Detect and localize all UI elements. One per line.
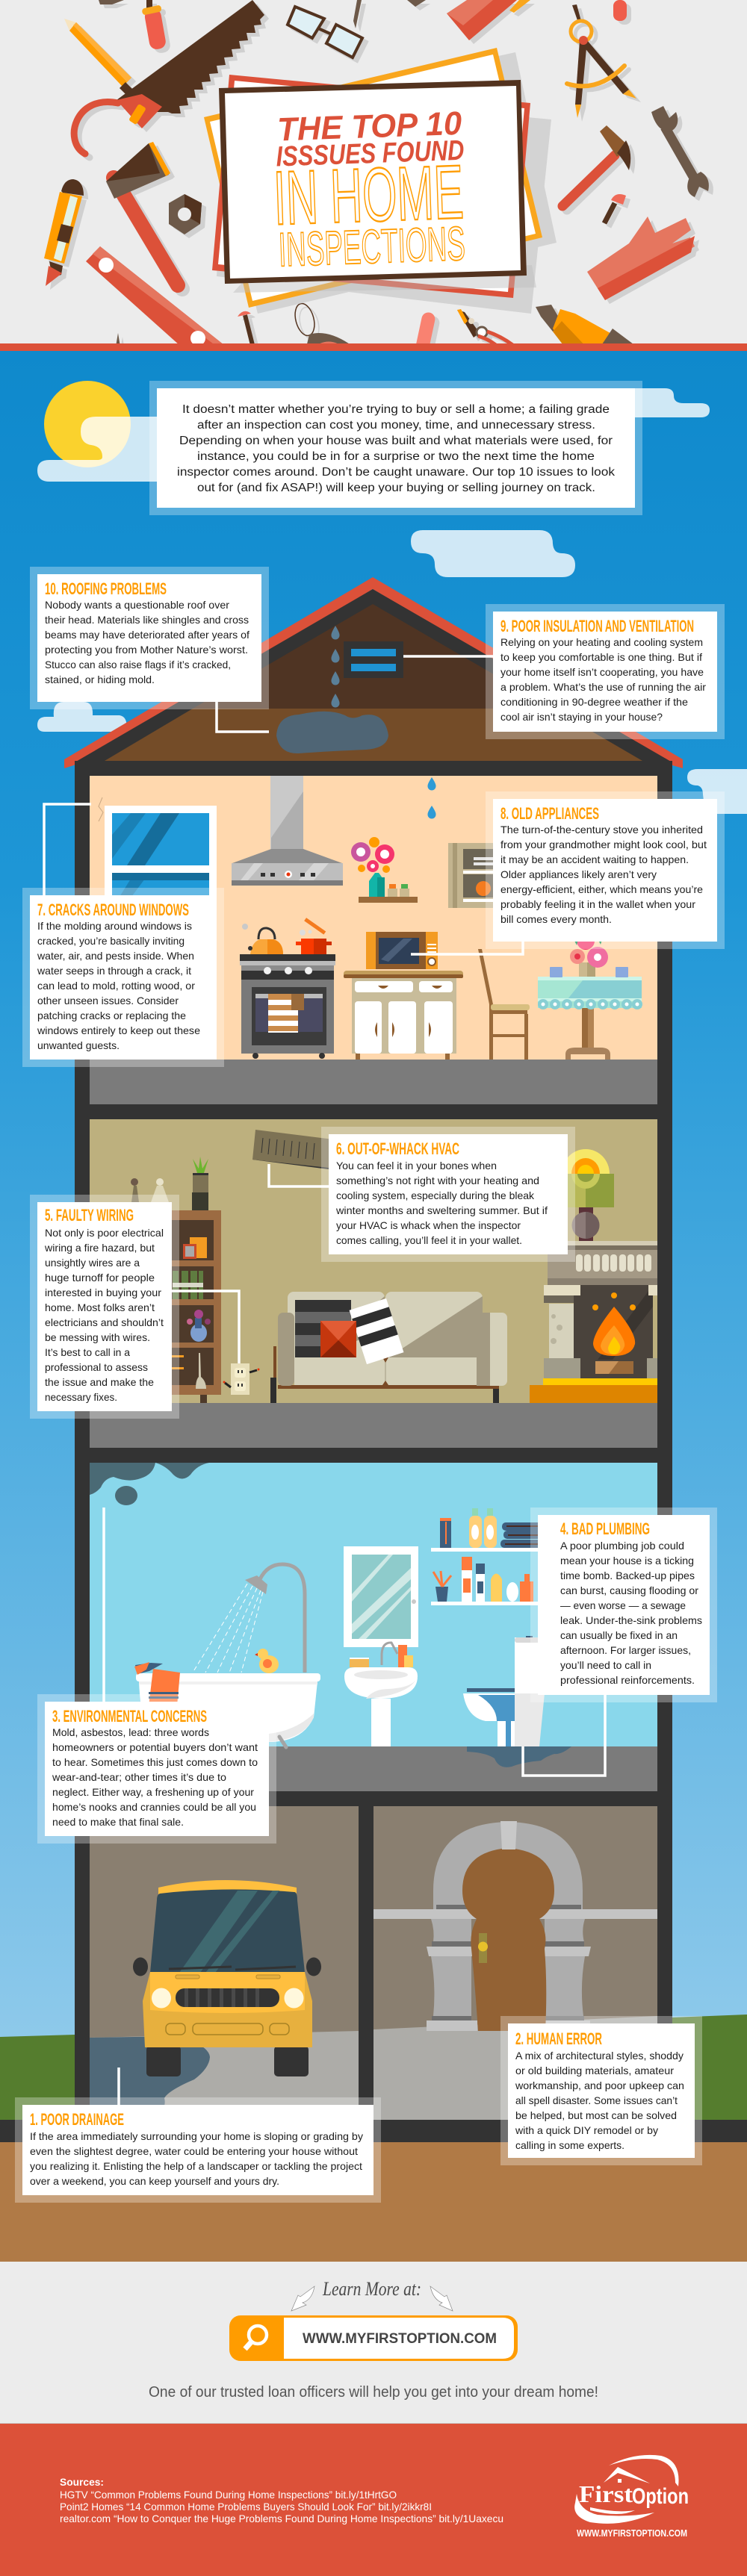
bathtub [136,1673,320,1747]
body text: all spell disaster. Some issues can’t [515,2094,678,2106]
heading: 4. BAD PLUMBING [560,1519,650,1538]
body text [37,920,200,1051]
learn more label: Learn More at: [322,2278,421,2300]
icon: compass [567,4,636,118]
body text: wear-and-tear; other times it’s due to [52,1771,226,1783]
body text: unsightly wires are a [45,1257,140,1269]
connector: 10 [217,702,269,732]
title text: IN HOME [272,149,465,241]
body text: bill comes every month. [500,913,612,925]
icon: hex nut [169,194,202,234]
footer [0,2423,747,2576]
icon: spirit level [86,246,223,343]
logo [574,2455,689,2539]
body text: Mold, asbestos, lead: three words [52,1726,209,1738]
intro text: out for (and fix ASAP!) will keep your buying or selling journey on track. [197,482,595,494]
ground band [0,2120,747,2142]
cloud left of roof [37,702,127,732]
panel: 7 cracks around windows [22,888,224,1067]
room: living room [90,1119,657,1448]
icon: hammer [562,125,630,206]
body text: unwanted guests. [37,1039,120,1051]
body text: cool air isn’t staying in your house? [500,711,663,723]
heading: 5. FAULTY WIRING [45,1206,134,1225]
icon: utility knife [44,179,84,286]
kitchen water drops [427,777,436,818]
panel: 9 poor insulation and ventilation [486,604,725,739]
body text: be messing with wires. [45,1331,150,1343]
shelves with toiletries [431,1508,545,1605]
red back sheet [212,75,530,298]
body text: stained, or hiding mold. [45,673,155,685]
body text [560,1540,702,1686]
title text: THE TOP 10 [276,105,462,148]
red pillow [320,1321,356,1357]
body text: something’s not right with your heating and [336,1175,539,1186]
title text: ISSSUES FOUND [276,135,465,173]
heading: 6. OUT-OF-WHACK HVAC [336,1139,459,1158]
room: bathroom [90,1463,657,1791]
body text: leak. Under-the-sink problems [560,1614,702,1626]
mirror [344,1546,418,1647]
body text: It’s best to call in a [45,1346,130,1358]
oven towel [268,994,304,1033]
body text: to hear. Sometimes this just comes down to [52,1756,258,1768]
orange back sheet [204,48,542,308]
body text: other unseen issues. Consider [37,995,179,1007]
body text: water, air, and pests inside. When [37,950,194,962]
intro text [177,403,615,494]
icon: nail [353,0,362,28]
icon: screw [604,194,626,223]
body text: time bomb. Backed-up pipes [560,1569,695,1581]
panel: 1 poor drainage [15,2097,381,2203]
outlet with frayed wires [223,1363,260,1395]
body text: A mix of architectural styles, shoddy [515,2050,684,2062]
body text: neglect. Either way, a freshening up of your [52,1786,254,1798]
heading: 2. HUMAN ERROR [515,2029,602,2048]
body text [45,599,249,685]
icon: drill [536,305,632,343]
arched door [374,1821,657,2031]
heading: 1. POOR DRAINAGE [30,2110,124,2129]
body text: cracked, you’re basically inviting [37,935,185,947]
body text: even the slightest degree, water could be entering your house without [30,2145,358,2157]
body text: Stucco can also raise flags if it’s cracked, [45,659,231,671]
body text: the issue and make the [45,1376,154,1388]
body text: your home itself isn’t cooperating, you have [500,666,704,678]
panel: 4 bad plumbing [530,1508,717,1702]
body text: can lead to mold, rotting wood, or [37,980,195,992]
range hood [232,776,343,886]
body text: winter months and sweltering summer. But if [335,1204,548,1216]
body text: water seeps in through a crack, it [37,965,191,977]
icon: small top brown tool [407,0,426,7]
header background [0,0,747,343]
intro text: instance, you could be in for a surprise or two the next time the home [197,450,595,463]
arrow left [291,2286,314,2311]
chair [478,949,530,1060]
intro text: It doesn’t matter whether you’re trying to buy or sell a home; a failing grade [182,403,610,416]
body text: your HVAC is whack when the inspector [336,1219,521,1231]
sink [344,1643,418,1746]
connector: 8 [411,942,523,954]
body text: it may be an accident waiting to happen. [500,853,689,865]
icon: sun [44,381,131,467]
logo: WWW.MYFIRSTOPTION.COM [577,2528,687,2539]
roof dark frame [75,589,672,762]
sources: HGTV “Common Problems Found During Home Inspections” bit.ly/1tHrtGO [60,2489,397,2501]
room: garage [90,1806,657,2120]
intro text: after an inspection can cost you money, time, and unnecessary stress. [197,419,595,432]
icon: screwdriver [141,0,167,51]
cloud above roof [411,530,575,577]
icon: pencil [64,19,133,96]
icon: saw [74,0,264,154]
bookshelf [90,1210,221,1403]
body text: you’ll need to call in [560,1659,651,1671]
body text: home’s nooks and crannies could be all you [52,1801,256,1813]
body text [52,1726,258,1828]
connector: 4 [523,1695,605,1776]
body text: can burst, causing flooding or [560,1584,698,1596]
panel: 8 old appliances [486,791,725,949]
heading: 8. OLD APPLIANCES [500,804,599,823]
body text: home. Most folks aren’t [45,1301,155,1313]
car [133,1880,321,2076]
window [105,806,217,903]
panel: intro [149,381,642,515]
attic lower [105,709,642,761]
title text: INSPECTIONS [278,217,466,276]
ground green [0,2015,747,2120]
counter and cabinets [344,971,463,1060]
arrow right [430,2286,453,2311]
intro text: inspector comes around. Don’t be caught unaware. Our top 10 issues to look [177,466,615,479]
connector: 6 [269,1164,329,1186]
body text [30,2130,363,2187]
body text [335,1160,548,1246]
body text: calling in some experts. [515,2139,624,2151]
body text: be helped, but most can be solved [515,2109,677,2121]
wall crack [99,797,103,821]
house walls [75,761,672,2120]
body text: probably feeling it in the wallet when your [500,898,695,910]
body text: wiring a fire hazard, but [44,1242,155,1254]
body text: workmanship, and poor upkeep can [515,2079,684,2091]
driveway [90,2031,359,2120]
sources [60,2476,503,2524]
floor leak [467,1746,571,1767]
panel: 5 faulty wiring [30,1195,179,1419]
heading: 7. CRACKS AROUND WINDOWS [37,900,189,919]
icon: top left tool [99,0,124,4]
kettle [242,924,283,954]
body text: their head. Materials like shingles and cross [45,614,249,626]
body text: Nobody wants a questionable roof over [45,599,229,611]
body text: professional reinforcements. [560,1674,695,1686]
body text: energy-efficient, either, which means you’re [500,883,703,895]
attic water drops [331,626,340,708]
body text [44,1227,164,1403]
call to action section [0,2262,747,2424]
panel: 6 out-of-whack hvac [321,1127,575,1262]
icon: bottom screw [238,311,252,345]
title text [270,105,468,277]
hvac vent [252,1130,333,1169]
heading: 10. ROOFING PROBLEMS [45,579,167,598]
body text: interested in buying your [45,1287,161,1298]
connector: 3 [102,1508,105,1702]
body text: can usually be fixed in an [560,1629,678,1641]
icon: magnifier [245,2326,267,2349]
search bar [229,2315,518,2361]
cloud right of intro [635,388,710,417]
connector: 1 [117,2068,120,2105]
body text: protecting you from Mother Nature’s worst. [45,644,248,656]
body text: conditioning in 90-degree weather if the [500,696,688,708]
body text: — even worse — a sewage [560,1599,686,1611]
finials on shelf [131,1178,169,1202]
toilet [463,1636,545,1746]
table with flowers [538,932,642,1060]
ground soil [0,2142,747,2262]
body text: patching cracks or replacing the [37,1009,186,1021]
sources: Sources: [60,2476,104,2488]
body text: you realizing it. Enlisting the help of a landscaper or tackling the project [30,2160,362,2172]
icon: axe [106,142,178,285]
body text [515,2050,684,2151]
sources: realtor.com “How to Conquer the Huge Problems Found During Home Inspections” bit.ly/1Uaxecu [60,2513,503,2524]
tagline: One of our trusted loan officers will help you get into your dream home! [149,2384,598,2401]
body text: You can feel it in your bones when [336,1160,497,1172]
url: WWW.MYFIRSTOPTION.COM [303,2331,497,2347]
connector: 7 [44,804,91,895]
body text: a problem. What’s the use of running the air [500,681,706,693]
rubber duck [255,1649,279,1673]
body text: homeowners or potential buyers don’t want [52,1741,258,1753]
main title card [219,80,527,284]
icon: red bottom stick [416,312,439,343]
icon: small bottom nail [117,333,124,343]
roof tiles [64,577,683,768]
body text: Older appliances likely aren’t very [500,868,657,880]
connector: 9 [403,655,493,658]
icon: red handle [613,0,627,21]
icon: glasses [288,7,362,57]
body text [500,824,707,925]
body text: If the area immediately surrounding your home is sloping or grading by [30,2130,363,2142]
body text: comes calling, you’ll feel it in your wallet. [336,1234,522,1246]
icon: wrench [651,106,709,197]
body text: or old building materials, amateur [515,2065,674,2076]
house roof [64,577,683,768]
logo: Option [632,2484,689,2509]
body text: huge turnoff for people [45,1272,155,1284]
potted plant [192,1157,208,1211]
body text [500,636,706,723]
body text: windows entirely to keep out these [37,1024,200,1036]
towel [149,1669,180,1706]
roof stain [276,712,388,753]
body text: necessary fixes. [45,1391,117,1403]
bath brush [134,1662,163,1675]
logo: First [579,2480,633,2507]
stove [240,954,335,1059]
striped grey pillow [295,1300,351,1357]
heading: 3. ENVIRONMENTAL CONCERNS [52,1707,207,1726]
body text: Not only is poor electrical [45,1227,164,1239]
body text: from your grandmother might look cool, but [500,839,707,850]
header tools illustration [44,0,709,358]
panel: 10 roofing problems [30,567,269,709]
icon: pliers [457,309,514,343]
title card stack [204,48,557,314]
sky background [0,351,747,2121]
icon: tape measure [294,303,349,343]
microwave [366,932,438,969]
body text: electricians and shouldn’t [45,1316,164,1328]
lamp [557,1149,614,1241]
body text: Relying on your heating and cooling system [500,636,703,648]
panel: 3 environmental concerns [37,1694,276,1844]
puddle [90,2036,210,2120]
room: kitchen [90,776,657,1104]
red divider strip [0,343,747,351]
body text: afternoon. For larger issues, [560,1644,691,1656]
body text: A poor plumbing job could [560,1540,684,1552]
body text: The turn-of-the-century stove you inherited [500,824,703,836]
body text: over a weekend, you can keep yourself and yours dry. [30,2175,279,2187]
intro text: Depending on when your house was built and what materials were used, for [179,435,613,447]
body text: need to make that final sale. [52,1816,184,1828]
sofa [270,1292,507,1403]
body text: beams may have deteriorated after years of [45,629,249,641]
body text: If the molding around windows is [37,920,192,932]
shower [193,1564,305,1673]
flame [593,1307,635,1356]
body text: to keep you comfortable is one thing. But if [500,651,702,663]
ceiling mold stain [90,1463,209,1505]
cloud right of house [687,769,747,814]
cloud left of intro [37,417,157,482]
fireplace [530,1241,657,1403]
wall cupboard [448,843,500,908]
attic vent [344,641,403,678]
flowers on shelf [351,837,418,903]
panel: 2 human error [500,2016,702,2165]
icon: glove [587,217,695,300]
icon: trowel [447,0,530,40]
pot [296,918,332,954]
black and white pillow [350,1298,403,1364]
attic upper [193,604,553,709]
sources: Point2 Homes “14 Common Home Problems Buyers Should Look For” bit.ly/2ikkr8I [60,2501,432,2513]
body text: professional to assess [45,1361,148,1373]
body text: with a quick DIY remodel or by [515,2124,658,2136]
body text: mean your house is a ticking [560,1555,694,1567]
connector: 5 [172,1291,239,1363]
body text: cooling system, especially during the bleak [336,1189,535,1201]
